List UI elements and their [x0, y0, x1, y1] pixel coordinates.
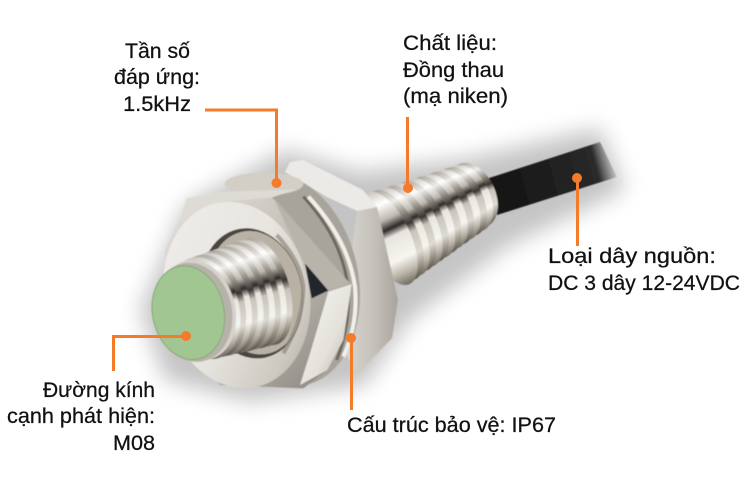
label text: Cấu trúc bảo vệ: IP67 [347, 414, 556, 437]
label text: đáp ứng: [114, 66, 200, 89]
callout: sensing diameter [7, 331, 191, 455]
label text [403, 32, 508, 108]
callout: response frequency [114, 40, 282, 188]
cable [483, 142, 617, 215]
front hex nut [165, 189, 352, 388]
callout: material [403, 32, 508, 193]
leader line [114, 331, 191, 371]
leader line [205, 110, 282, 188]
label text: 1.5kHz [123, 93, 191, 116]
leader line [346, 333, 356, 410]
callout: cable type [548, 173, 740, 295]
sensor product photo [144, 142, 617, 402]
label text: DC 3 dây 12-24VDC [548, 272, 740, 295]
label text: M08 [113, 432, 155, 455]
label text: Tần số [125, 40, 190, 63]
front thread [144, 231, 303, 369]
label text [114, 40, 200, 116]
leader line [403, 117, 413, 193]
label text: (mạ niken) [403, 85, 508, 108]
label text [7, 379, 155, 455]
label text: Chất liệu: [403, 32, 497, 55]
label text: cạnh phát hiện: [7, 405, 155, 428]
rear threaded body [347, 155, 508, 293]
label text: Loại dây nguồn: [548, 245, 716, 268]
label text: Đồng thau [403, 59, 504, 82]
product shadow [140, 128, 625, 402]
front washer [146, 188, 327, 402]
rear nut [285, 160, 398, 375]
callout: protection structure [346, 333, 556, 437]
green sensing face [144, 259, 233, 366]
middle washer [188, 159, 379, 401]
leader line [572, 173, 582, 246]
label text [548, 245, 740, 295]
label text: Đường kính [43, 379, 155, 402]
